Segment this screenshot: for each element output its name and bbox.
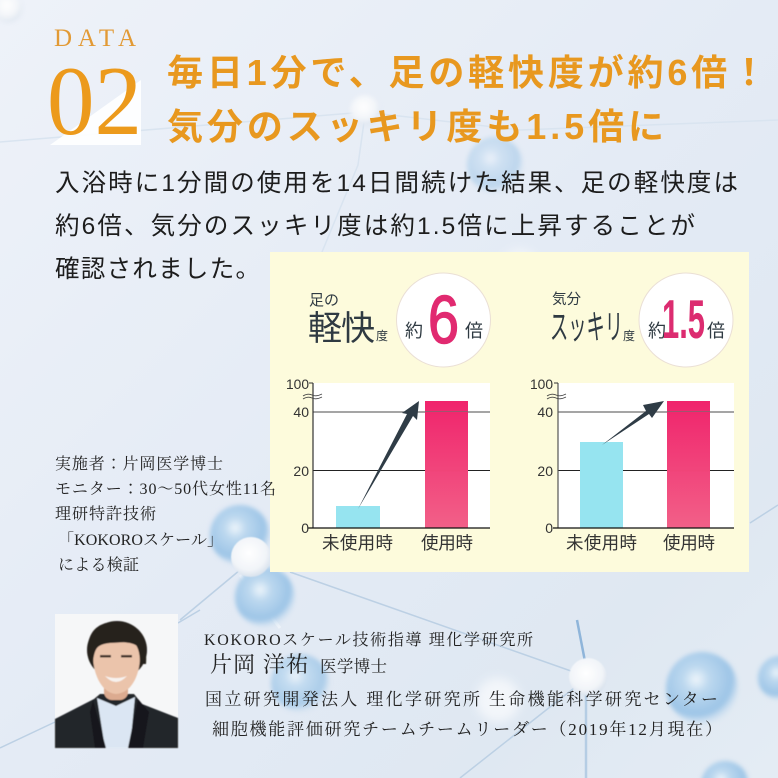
panel: charts <box>270 252 749 572</box>
heading <box>167 52 767 147</box>
intro text <box>55 169 738 283</box>
callout: about 1.5 times: 1.5 <box>662 288 705 350</box>
supervisor profile: KOKOROスケール技術指導 理化学研究所 <box>204 631 533 649</box>
study details: 「KOKOROスケール」 <box>58 531 223 549</box>
callout: about 1.5 times: 倍 <box>707 321 725 341</box>
bar chart: refreshed feeling: 0 <box>545 520 553 536</box>
bar chart: foot lightness: 0 <box>301 520 309 536</box>
metric title: foot lightness: 軽快 <box>308 310 375 348</box>
bar chart: refreshed feeling: 40 <box>537 404 553 420</box>
metric title: refreshed feeling: 度 <box>623 329 635 343</box>
bar chart: foot lightness: 100 <box>286 376 309 392</box>
bar chart: foot lightness: 使用時 <box>421 533 473 553</box>
callout: about 1.5 times <box>639 273 733 367</box>
study details: による検証 <box>58 556 139 574</box>
study details <box>55 455 276 574</box>
portrait photo <box>55 614 178 748</box>
bar chart: foot lightness: 20 <box>293 463 309 479</box>
bar chart: refreshed feeling: 未使用時 <box>566 533 637 553</box>
bar chart: foot lightness <box>286 376 490 553</box>
arrow <box>602 401 664 445</box>
callout: about 6 times: 倍 <box>465 321 483 341</box>
bar chart: foot lightness: 40 <box>293 404 309 420</box>
bar chart: refreshed feeling: 100 <box>530 376 553 392</box>
metric title: foot lightness <box>308 292 388 348</box>
study details: 理研特許技術 <box>55 505 156 523</box>
supervisor profile: 細胞機能評価研究チームチームリーダー（2019年12月現在） <box>212 719 722 739</box>
metric title: refreshed feeling: 気分 <box>552 291 581 308</box>
metric title: refreshed feeling <box>550 291 635 347</box>
metric title: foot lightness: 足の <box>309 292 339 309</box>
callout: about 1.5 times: 約 <box>648 321 666 341</box>
callout: about 6 times <box>396 273 490 367</box>
supervisor profile: 片岡 洋祐 <box>210 652 308 677</box>
callout: about 6 times: 6 <box>428 282 459 358</box>
intro text: 確認されました。 <box>55 255 260 283</box>
supervisor profile <box>204 631 722 739</box>
supervisor profile: 医学博士 <box>320 657 387 676</box>
supervisor profile: 国立研究開発法人 理化学研究所 生命機能科学研究センター <box>205 690 718 709</box>
heading: 気分のスッキリ度も1.5倍に <box>167 106 664 147</box>
bar chart: refreshed feeling: 20 <box>537 463 553 479</box>
callout: about 6 times: 約 <box>405 321 423 341</box>
bar chart: refreshed feeling: 使用時 <box>663 533 715 553</box>
metric title: refreshed feeling: スッキリ <box>550 309 623 347</box>
badge: number 02: 02 <box>47 47 142 156</box>
metric title: foot lightness: 度 <box>376 329 388 343</box>
bar chart: foot lightness: 未使用時 <box>322 533 393 553</box>
intro text: 入浴時に1分間の使用を14日間続けた結果、足の軽快度は <box>55 169 738 197</box>
arrow <box>358 401 419 509</box>
study details: 実施者：片岡医学博士 <box>55 455 223 473</box>
study details: モニター：30～50代女性11名 <box>55 480 276 498</box>
bar chart: refreshed feeling <box>530 376 734 553</box>
heading: 毎日1分で、足の軽快度が約6倍！ <box>167 52 767 93</box>
label: DATA: DATA <box>54 25 136 52</box>
intro text: 約6倍、気分のスッキリ度は約1.5倍に上昇することが <box>55 212 695 240</box>
